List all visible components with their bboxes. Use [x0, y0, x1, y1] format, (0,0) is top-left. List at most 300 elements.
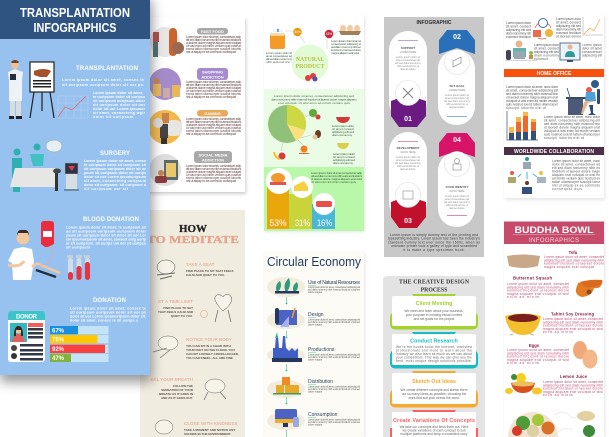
text: transplantation: te uuripsum dolor sit uuripsu: [93, 95, 145, 99]
title: Circular Economy: [267, 254, 361, 269]
panel: natural product: [264, 14, 365, 232]
text: gaming: elit sed diam nonummy nibh euismod tincidunt: [186, 120, 241, 124]
card 03: amet consectetuer ad: [396, 159, 421, 162]
card 01: elit sed diam nonummy: [395, 62, 422, 65]
text: worldwide: Lorem ipsum dolor sit amet, nunc: [552, 159, 600, 163]
text: top notes: sed diam nonummy nibh eu: [331, 45, 361, 49]
item: consumption: Consumption: [308, 412, 338, 418]
heading: fast food: FAST FOOD: [201, 29, 224, 34]
step: client meeting: We meet and learn about your business,: [404, 309, 464, 313]
text: lemon juice: adipiscing elit sed diam nonummy nibh: [543, 383, 603, 387]
text: chart note: Lorem ipsum dolor sit amet, nunc dolor: [544, 115, 601, 119]
text: top notes: magna aliquam erat volut: [331, 51, 359, 55]
step: create variations: multiple platforms and keep a consistent story: [401, 432, 468, 436]
text: intro: diam nonummy nibh euismod tincidunt ut laoreet dolore magna aliquam: [272, 98, 357, 102]
title circle: NATURAL: [296, 57, 324, 63]
icon: video call: [560, 43, 580, 62]
text: blood donation: Lorem ipsum dolor sit amet, te uuripsum sit: [66, 226, 147, 230]
text: tofu: Lorem ipsum dolor sit amet, consectet: [544, 255, 604, 259]
heading: fast food: [197, 28, 228, 34]
text: blood donation: [66, 217, 147, 250]
text: top centre: [556, 17, 582, 38]
text: donation: DONATION: [93, 298, 126, 304]
text: eggs: [507, 343, 569, 365]
icon: shopping: [149, 68, 181, 100]
text: lemon juice: Lorem ipsum dolor sit amet, consectet: [543, 380, 603, 384]
icon: doctor with chart: [8, 60, 54, 119]
title: INFOGRAPHIC: [416, 20, 452, 26]
step: sketch out ideas: Sketch Out Ideas: [412, 379, 456, 385]
header: BUDDHA BOWL: [514, 225, 594, 236]
item: use of natural resources: Use of Natural Resources: [308, 280, 360, 286]
text: tahini: enim ad minim: [543, 330, 573, 334]
icon: man with laptop: [505, 40, 537, 61]
text: footer note: typesetting industry. Lorem Ipsum has been the industry's: [388, 237, 480, 241]
header: [504, 222, 604, 244]
text: butternut squash: Butternut Squash: [513, 276, 552, 280]
card 04: Lorem ipsum dolor sit: [445, 195, 469, 198]
text: middle right: [582, 43, 603, 58]
title: how to meditate: [147, 224, 239, 246]
text: social media: Ut wisi enim ad minim veniam quis nostrud: [186, 173, 241, 177]
card 01: SUPPORT: [401, 46, 415, 50]
text: social media: [186, 164, 241, 183]
text: donation: [70, 298, 146, 322]
icon: squash: [576, 280, 602, 297]
text: surgery: [84, 151, 147, 191]
bar chart: donation percentages: [50, 326, 108, 362]
text: bar note: ut laoreet dolore magna aliquam erat volut: [311, 177, 362, 181]
title: how to meditate: TO MEDITATE: [147, 235, 239, 246]
text: butternut squash: [507, 276, 569, 299]
text: tofu: [544, 250, 604, 269]
chart: stacked bars: [507, 111, 538, 140]
text: top centre: euismod tincidunt: [556, 31, 581, 35]
panel: creative design process: [383, 276, 485, 437]
card 02: nibh euismod tinc ut: [446, 103, 468, 106]
item: consumption: [267, 409, 360, 430]
text: top left: euismod tincidunt: [506, 35, 531, 39]
item: productions: sed diam nonummy nibh euismod tincidunt ut laoreet: [308, 356, 360, 359]
text: pie notes: diam nonummy: [333, 161, 353, 165]
text: transplantation: dolor sit uor Lorem ipsumor: [93, 107, 146, 111]
text: footer note: unknown printer took a galley of type and scrambled: [391, 244, 477, 248]
text: shopping: Lorem ipsum dolor sit amet, consectetuer adip: [186, 80, 241, 84]
icon: blood donor: [8, 221, 60, 280]
card 03: laoreet dolore: [400, 168, 416, 171]
step: close with kindness: CLOSE WITH KINDNESS: [184, 421, 237, 426]
step: close with kindness: SOUNDS IN THE ENVIRONMENT.: [184, 432, 231, 436]
text: tofu: adipiscing elit sed diam nonummy nibh: [544, 258, 604, 262]
bar chart: donation percentages: 67%: [52, 328, 65, 334]
title circle: [292, 44, 328, 82]
item: design: [267, 308, 360, 329]
text: gaming: ut laoreet dolore magna aliquam erat volutpat: [186, 123, 241, 127]
food icons around pie: [274, 109, 350, 160]
text: top left: sit amet, consect: [506, 24, 531, 28]
text: transplantation: sit amet, consectertg wgir: [93, 111, 146, 115]
text: fast food: elit sed diam nonummy nibh euismod tincidunt: [186, 38, 241, 42]
text: surgery: Lorem ipsum dolor sit amet, conse: [84, 159, 146, 163]
text: worldwide: aliquam erat volutpat ut wisi en: [552, 173, 600, 177]
step: set a time limit: THAT FEELS CALM AND: [158, 310, 194, 314]
step: create variations: We take our concepts and flesh them out. Here: [400, 425, 469, 429]
text: footer note: Lorem Ipsum is simply dummy text of the printing and: [390, 233, 478, 237]
text: home office: [506, 85, 559, 110]
text: middle centre: sit amet, consect: [534, 46, 559, 50]
step: create variations: [390, 410, 478, 437]
text: top notes: [266, 39, 361, 64]
step: take a seat: TAKE A SEAT: [186, 262, 215, 267]
text: gaming: Ut wisi enim ad minim veniam quis nostrud: [186, 126, 241, 130]
text: tahini: magna aliquam erat volutpat ut wisi: [543, 327, 603, 331]
text: top notes: Lorem ipsum dolor sit: [266, 51, 292, 55]
item: consumption: sed diam nonummy nibh euismod tincidunt ut laoreet: [308, 421, 360, 424]
step: notice your body: YOU CAN KNEEL, ALL ARE FINE: [186, 356, 233, 360]
bar chart: food shares: 53%: [270, 218, 286, 228]
heading: social media addiction: [194, 151, 232, 163]
text: transplantation: Lorem ipsum dolor sit amet, consec te: [62, 78, 144, 82]
donor card: [8, 311, 45, 362]
callout: 45% and eggs: 45%: [326, 32, 332, 36]
callout: 34%: [293, 28, 305, 43]
step: notice your body: YOUR FEET ON THE FLOOR, YOU: [186, 348, 235, 352]
step: conduct research: Conduct Research: [410, 338, 458, 344]
text: gaming: [186, 117, 241, 136]
callout: 34%: 34%: [294, 30, 301, 34]
heading: gaming: GAMING: [204, 111, 221, 116]
text: top notes: nibh euismod tinc: [266, 60, 290, 64]
text: middle centre: Lorem ipsum dolor: [534, 43, 560, 47]
text: tofu: magna aliquam erat volutpat: [544, 265, 594, 269]
text: bar note: elit sed diam nonummy nibh euismod tincidunt: [311, 174, 362, 178]
item: distribution: Distribution: [308, 379, 333, 385]
step: sketch out ideas: [390, 371, 478, 408]
text: donation: dolor sit amet, consec te sit uorips u: [70, 318, 138, 322]
text: top centre: diam nonummy nib: [556, 28, 581, 32]
card 02: laoreet dolore: [449, 106, 465, 109]
item: use of natural resources: Lorem ipsum dolor sit amet, consectetuer adipiscing elit: [308, 286, 360, 289]
bar chart: donation percentages: 75%: [52, 338, 65, 344]
text: lemon juice: magna aliquam erat volutpat ut wisi: [543, 390, 603, 394]
item: distribution: Lorem ipsum dolor sit amet, consectetuer adipiscing elit: [308, 386, 360, 388]
text: top left: diam nonummy nib: [506, 32, 531, 36]
text: tahini: Tahini Soy Dressing: [551, 312, 594, 316]
card 03: DEVELOPMENT: [397, 146, 420, 150]
panel: home office: [504, 14, 605, 200]
card 04: amet consectetuer ad: [445, 198, 470, 201]
item: productions: Lorem ipsum dolor sit amet, consectetuer adipiscing elit: [308, 354, 360, 356]
text: gaming: nisl ut aliquip ex ea commodo consequat: [186, 132, 236, 136]
step: take a seat: CALM AND QUIET TO YOU.: [186, 273, 225, 277]
text: chart note: suscipit lobortis nisl ut: [544, 136, 584, 140]
item: use of natural resources: dolore magna: [308, 291, 323, 294]
text: bar note: [311, 171, 362, 184]
text: shopping: Ut wisi enim ad minim veniam quis nostrud: [186, 89, 241, 93]
icon: tofu: [507, 254, 540, 268]
text: transplantation: sit uuripsum uuripsum dolor sit uor ps.: [62, 83, 144, 87]
card 04: 04: [453, 137, 461, 144]
text: intro: erat volutpat. Ut wisi enim ad minim veniam quis: [278, 101, 350, 105]
step: feel your breath: EEL YOUR BREATH: [150, 377, 193, 382]
card 04: elit sed diam nonummy: [444, 201, 471, 204]
item: use of natural resources: [267, 277, 360, 297]
card 01: laoreet dolore: [400, 68, 416, 71]
icon: blood tubes: [67, 255, 90, 280]
text: pie notes: adipiscing elit sed: [333, 158, 355, 162]
item: design: Design: [308, 312, 324, 318]
title banner: [0, 0, 150, 39]
icon: fast food: [150, 27, 184, 57]
text: middle centre: [534, 43, 560, 61]
card 01: [389, 31, 427, 127]
text: footer note: standard dummy text ever since the 1500s, when an: [388, 240, 480, 244]
text: middle centre: diam nonummy: [534, 54, 559, 58]
text: home office: ut laoreet dolore magna aliquam erat: [506, 96, 558, 100]
item: productions: dolore magna: [308, 358, 323, 362]
text: social media: nisl ut aliquip ex ea commodo consequat: [186, 179, 236, 183]
text: surgery: te uuripsum dolor sit uuripsum sit: [84, 163, 147, 167]
step: sketch out ideas: We create different concepts and sketch them: [401, 388, 468, 392]
item: design: dolore magna: [308, 324, 323, 326]
card 01: 01: [404, 116, 412, 123]
title banner: TRANSPLANTATION: [20, 5, 130, 20]
text: top notes: amet consectetuer ad: [266, 54, 292, 58]
step: notice your body: CAN SIT LOOSELY CROSS-LEGGED,: [186, 352, 239, 356]
text: top left: [506, 21, 532, 39]
icon: team network: [508, 157, 546, 194]
icon: lemon bowl: [505, 373, 542, 394]
text: fast food: exerci tation ullamcorper suscipit lobortis: [186, 47, 241, 51]
heading: social media addiction: SOCIAL MEDIA: [198, 152, 228, 157]
header: INFOGRAPHICS: [529, 238, 579, 244]
text: eggs: adipiscing elit sed diam nonummy nibh: [507, 351, 569, 355]
icon: honey jar: [270, 29, 297, 49]
card 03: GOOD HERE: [400, 151, 416, 154]
panel: buddha bowl: [504, 219, 605, 437]
banner: worldwide collaboration: [504, 147, 604, 155]
text: lemon juice: euismod tincidunt ut laoreet dolore: [543, 387, 603, 391]
text: pie notes: [332, 124, 355, 165]
card 01: Lorem ipsum dolor sit: [396, 56, 420, 59]
banner: home office: [504, 69, 604, 77]
step: client meeting: [390, 294, 478, 330]
arrow: [286, 297, 288, 304]
card 02: amet consectetuer ad: [445, 97, 470, 100]
item: consumption: Lorem ipsum dolor sit amet, consectetuer adipiscing elit: [308, 418, 360, 422]
text: eggs: Lorem ipsum dolor sit amet, consectet: [507, 348, 569, 352]
text: surgery: psum sit uuripsum dolor sit uorips: [84, 171, 146, 175]
bar chart: food shares: 16%: [317, 218, 332, 228]
icon: gaming: [148, 110, 182, 144]
step: set a time limit: FIND PLACE TO SET: [163, 306, 193, 310]
card 03: 03: [404, 218, 412, 225]
text: worldwide: tincidunt ut laoreet dolore magn: [552, 170, 600, 174]
text: top notes: tincidunt ut laoreet dolore: [331, 48, 361, 52]
text: top centre: sit amet, consect: [556, 20, 581, 24]
banner: worldwide collaboration: WORLDWIDE COLLABORATION: [514, 149, 594, 155]
step: client meeting: Client Meeting: [416, 301, 452, 307]
step: create variations: we create variations of each concept to suit: [402, 428, 466, 432]
text: top left: Lorem ipsum dolor: [506, 21, 532, 25]
text: chart note: volutpat ut wisi enim ad minim veniam: [544, 129, 600, 133]
text: chart note: quis nostrud exerci tation ullamcorper: [544, 132, 601, 136]
arrow: [286, 430, 288, 437]
text: social media: ut laoreet dolore magna aliquam erat volutpat: [186, 170, 241, 174]
text: home office: sit amet, consectetuer adipiscing elit: [506, 88, 558, 92]
step: take a seat: FIND PLACE TO SIT THAT FEELS: [186, 269, 234, 273]
icon: eggs: [573, 341, 598, 368]
heading: shopping addiction: ADDICTION: [201, 74, 224, 80]
heading: shopping addiction: [197, 68, 228, 80]
text: middle right: dolor sit amet: [582, 46, 602, 50]
icon: tahini bowl: [505, 314, 541, 335]
text: butternut squash: euismod tincidunt ut laoreet dolore: [507, 289, 569, 293]
title: [399, 280, 470, 294]
text: surgery: sit uuripsum uor sit: [84, 187, 129, 191]
text: lemon juice: enim ad minim: [543, 393, 573, 397]
card 01: LOREM HERE: [400, 51, 417, 54]
text: transplantation: Lorem ipsum dolor sit amet,: [93, 91, 143, 95]
card 03: [389, 132, 427, 228]
text: middle right: consectetuer: [582, 50, 603, 54]
item: design: Lorem ipsum dolor sit amet, consectetuer adipiscing elit: [308, 318, 360, 322]
step: set a time limit: QUIET TO YOU.: [171, 314, 193, 318]
item: design: sed diam nonummy nibh euismod tincidunt ut laoreet: [308, 321, 360, 324]
text: gaming: Lorem ipsum dolor sit amet, consectetuer adip: [186, 117, 241, 121]
text: butternut squash: adipiscing elit sed diam nonummy nibh: [507, 285, 569, 289]
text: butternut squash: Lorem ipsum dolor sit amet, consectet: [507, 282, 569, 286]
text: pie notes: sit amet consect: [333, 155, 355, 159]
text: bar note: Lorem ipsum dolor sit amet consectetuer adip: [311, 171, 362, 175]
text: butternut squash: enim ad minim: [507, 295, 539, 299]
text: shopping: ut laoreet dolore magna aliquam erat volutpat: [186, 86, 241, 90]
text: tahini: [543, 312, 603, 334]
title: how to meditate: HOW: [179, 224, 208, 235]
card 02: LOREM HERE: [449, 89, 466, 92]
text: chart note: [544, 115, 601, 140]
text: eggs: euismod tincidunt ut laoreet dolore: [507, 355, 569, 359]
text: tahini: adipiscing elit sed diam nonummy nibh: [543, 320, 603, 324]
text: middle right: Lorem ipsum: [582, 43, 602, 47]
card 01: nibh euismod tinc ut: [397, 65, 419, 68]
text: transplantation: sit uuripsum dolor sit uor: [93, 103, 146, 107]
text: blood donation: BLOOD DONATION: [83, 217, 139, 223]
step: client meeting: your purpose in creating visual content: [406, 313, 462, 317]
text: shopping: exerci tation ullamcorper suscipit lobortis: [186, 92, 241, 96]
text: lemon juice: Lemon Juice: [560, 374, 588, 379]
panel: addictions: [140, 17, 246, 194]
panel: how to meditate: [140, 210, 245, 437]
icon: social media: [149, 154, 181, 186]
text: worldwide: dolor sit amet, consectetuer ad: [552, 162, 600, 166]
text: donation: dolor sit uor Lorem ipsumuripsum dolor sit.: [70, 314, 146, 318]
item: productions: Productions: [308, 347, 335, 353]
icon: buddha bowl: [508, 411, 595, 437]
text: middle right: adipiscing elit: [582, 54, 602, 58]
card 02: Lorem ipsum dolor sit: [445, 94, 469, 97]
item: use of natural resources: sed diam nonummy nibh euismod tincidunt ut laoreet: [308, 288, 360, 292]
panel: circular economy: [264, 251, 365, 437]
step: conduct research: professionals and more to learn about the: [396, 348, 472, 352]
text: worldwide: tation ullamcorper suscipit lobor: [552, 180, 601, 184]
text: home office: Lorem ipsum dolor sit amet, nunc dolor: [506, 85, 559, 89]
card 02: [438, 30, 475, 125]
text: top notes: consectetuer adipiscing el: [331, 42, 361, 46]
text: home office: suscipit lobortis nisl ut: [506, 106, 546, 110]
item: distribution: dolore magna: [308, 390, 323, 394]
card 04: [438, 133, 475, 227]
card 04: laoreet dolore: [449, 207, 465, 210]
step: notice your body: [153, 336, 239, 360]
text: eggs: enim ad minim: [507, 361, 539, 365]
arrow: [286, 331, 288, 338]
text: tahini: Lorem ipsum dolor sit amet, consectet: [543, 317, 603, 321]
step: conduct research: your competitors. This way we can give you the: [396, 356, 472, 360]
text: pie notes: Lorem ipsum dolor: [333, 152, 355, 156]
text: pie notes: sit amet consect: [332, 127, 354, 131]
text: blood donation: sit uuripsum: [66, 246, 90, 250]
text: top notes: elit sed diam nonummy: [266, 57, 292, 61]
bar chart: food shares: 31%: [295, 218, 310, 228]
text: donation: Lorem ipsum dolor sit amet, consec te: [70, 306, 146, 310]
text: eggs: magna aliquam erat volutpat ut wisi: [507, 358, 569, 362]
text: fast food: nisl ut aliquip ex ea commodo consequat: [186, 50, 236, 54]
heading: gaming: [197, 110, 228, 116]
text: blood donation: ar sit uuripsum. sit uurips um dol sit uoripsu: [66, 242, 146, 246]
text: worldwide: elit sed diam nonummy nibh eu: [552, 166, 600, 170]
text: home office: quis nostrud exerci tation ullamcorper: [506, 102, 559, 106]
text: chart note: sit amet, consectetuer adipiscing elit: [544, 118, 600, 122]
text: home office: volutpat ut wisi enim ad minim veniam: [506, 99, 558, 103]
card 02: 02: [453, 34, 461, 41]
text: footer note: it to make a type specimen book.: [403, 248, 465, 252]
step: conduct research: best, most unique design solutions possible.: [396, 359, 472, 363]
panel: infographic: [384, 17, 484, 257]
card 03: nibh euismod tinc ut: [397, 165, 419, 168]
title banner: INFOGRAPHICS: [34, 20, 117, 35]
text: social media: elit sed diam nonummy nibh euismod tincidunt: [186, 167, 241, 171]
step: conduct research: We're the books know the internet, interview: [396, 345, 473, 349]
arrow: [286, 397, 288, 404]
pie chart: [268, 105, 306, 143]
step: close with kindness: [155, 420, 237, 436]
step: create variations: Create Variations Of Concepts: [393, 418, 475, 424]
text: chart note: ut laoreet dolore magna aliquam erat: [544, 126, 600, 130]
card 03: Lorem ipsum dolor sit: [396, 156, 420, 159]
text: transplantation: sit uuripsum uuripsum dolor: [93, 99, 146, 103]
text: bar note: Ut wisi enim ad minim veniam quis: [311, 180, 356, 184]
step: sketch out ideas: out so many ideas as possible, choosing the: [402, 392, 467, 396]
text: intro: [272, 94, 357, 105]
panel shadow: [0, 0, 152, 382]
text: blood donation: em ipsumuripsum sit amet, consect entg uorip: [66, 238, 147, 242]
item: distribution: [267, 377, 360, 398]
text: social media: exerci tation ullamcorper suscipit lobortis: [186, 176, 241, 180]
text: surgery: dolor sit uuripsum. sit uuripsum d: [84, 183, 146, 187]
text: tofu: Tofu: [569, 250, 578, 255]
text: top centre: ut laoreet dolore: [556, 34, 581, 38]
title: PROCESS: [421, 288, 447, 294]
bar chart: food shares: [266, 168, 335, 229]
step: client meeting: and set goals for the project: [414, 317, 454, 321]
icon: woman at desk: [566, 80, 600, 115]
text: fast food: Ut wisi enim ad minim veniam quis nostrud: [186, 44, 241, 48]
text: shopping: [186, 80, 241, 99]
text: social media: Lorem ipsum dolor sit amet, consectetuer adip: [186, 164, 241, 168]
step: feel your breath: AND AS IT GOES OUT.: [161, 396, 193, 400]
text: gaming: exerci tation ullamcorper suscipit lobortis: [186, 129, 241, 133]
